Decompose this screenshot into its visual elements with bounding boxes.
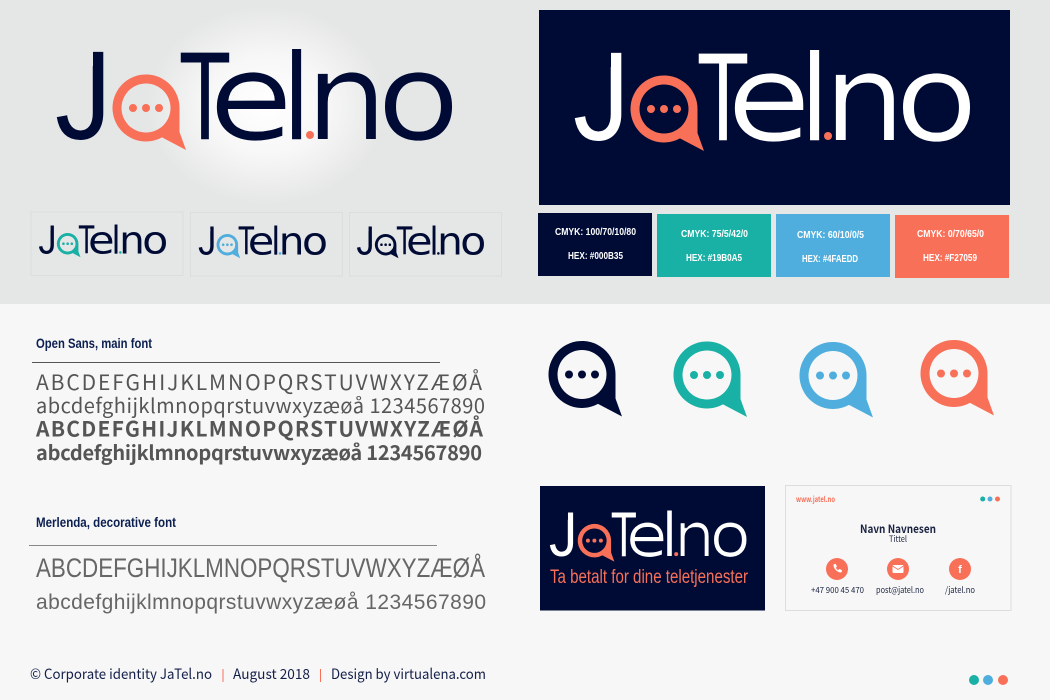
- colour swatch: navy: CMYK: 100/70/10/80: [555, 226, 636, 238]
- panel: white background glow: [147, 6, 387, 205]
- panel: navy logo variant: T: [396, 219, 412, 264]
- panel: blue logo variant: o: [302, 219, 328, 264]
- panel: blue logo variant: l: [271, 220, 280, 264]
- panel: navy logo variant: J: [356, 219, 375, 264]
- panel: reversed logo on navy: l: [800, 30, 829, 169]
- footer colour dots: [969, 675, 1008, 685]
- panel: teal logo variant: o: [142, 218, 168, 263]
- panel: decorative font specimen: [29, 514, 486, 614]
- panel: navy logo variant: n: [437, 220, 463, 264]
- icon: blue speech bubble: [800, 342, 873, 418]
- panel: navy logo variant: e: [406, 219, 433, 264]
- panel: logo and colour background: [0, 0, 1050, 304]
- panel: teal logo variant: e: [88, 218, 115, 263]
- phone number: +47 900 45 470: [811, 584, 864, 596]
- panel: navy business card front: [540, 486, 765, 610]
- panel: navy business card front: o: [709, 502, 751, 571]
- panel: main font specimen: [32, 335, 485, 466]
- tagline: Ta betalt for dine teletjenester: [550, 567, 749, 588]
- colour swatch: blue: CMYK: 60/10/0/5: [797, 229, 864, 241]
- text block: decorative uppercase: ABCDEFGHIJKLMNOPQRSTUVWXYZÆØÅ: [36, 552, 485, 583]
- text block: decorative lowercase and digits: abcdefghijklmnopqrstuvwxyzæøå 1234567890: [36, 591, 486, 614]
- colour swatch: blue: HEX: #4FAEDD: [802, 253, 858, 265]
- job title: Tittel: [889, 533, 908, 545]
- panel: blue logo variant: T: [238, 219, 254, 264]
- panel: blue logo variant: [190, 212, 342, 276]
- panel: blue logo variant: e: [248, 219, 274, 264]
- panel: navy business card front: J: [549, 499, 577, 570]
- text block: bold lowercase and digits: abcdefghijklmnopqrstuvwxyzæøå 1234567890: [36, 437, 482, 466]
- main logo: e: [208, 29, 294, 168]
- icon: envelope: [887, 558, 909, 580]
- footer credits: [30, 664, 486, 684]
- colour swatch: navy: [538, 213, 652, 276]
- email address: post@jatel.no: [876, 584, 924, 596]
- panel: blue logo variant: n: [279, 220, 304, 264]
- panel: navy business card front: l: [662, 501, 677, 570]
- panel: teal logo variant: l: [112, 219, 121, 263]
- panel: reversed logo on navy: [539, 10, 1010, 205]
- footer credits: August 2018: [233, 664, 310, 684]
- panel: reversed logo on navy: o: [894, 31, 979, 169]
- panel: teal logo variant: T: [78, 218, 94, 263]
- footer credits: Design by virtualena.com: [331, 664, 486, 684]
- panel: blue logo variant: J: [198, 219, 216, 264]
- main logo: o: [376, 30, 461, 168]
- panel: business card back: [786, 486, 1011, 610]
- text block: bold uppercase: ABCDEFGHIJKLMNOPQRSTUVWXYZÆØÅ: [35, 414, 484, 444]
- main logo: n: [305, 29, 388, 168]
- website address: www.jatel.no: [796, 494, 835, 505]
- main logo: l: [282, 29, 311, 168]
- footer credits: © Corporate identity JaTel.no: [30, 664, 212, 684]
- panel: navy logo variant: o: [460, 219, 486, 264]
- panel: navy business card front: e: [625, 502, 668, 571]
- facebook handle: /jatel.no: [945, 584, 975, 596]
- panel: reversed logo on navy: J: [573, 26, 630, 167]
- icon: facebook: [949, 558, 971, 580]
- panel: navy business card front: n: [674, 501, 715, 570]
- panel: reversed logo on navy: e: [726, 30, 812, 169]
- colour swatch: coral: [895, 215, 1009, 278]
- panel: navy business card front: T: [611, 501, 636, 570]
- icon: phone: [826, 558, 848, 580]
- panel: navy logo variant: l: [430, 220, 439, 264]
- panel: teal logo variant: J: [38, 218, 57, 263]
- icon: navy speech bubble: [548, 341, 622, 416]
- colour swatch: coral: HEX: #F27059: [923, 252, 977, 264]
- card colour dots: [980, 496, 1000, 502]
- name: Navn Navnesen: [860, 521, 936, 537]
- colour swatch: blue: [776, 214, 890, 277]
- heading: decorative font: Merlenda, decorative font: [36, 514, 176, 530]
- panel: teal logo variant: n: [119, 219, 145, 263]
- main logo: J: [55, 25, 112, 166]
- colour swatch: navy: HEX: #000B35: [568, 250, 623, 262]
- colour swatch: teal: [657, 214, 771, 277]
- main logo: T: [180, 28, 229, 167]
- text block: regular uppercase: ABCDEFGHIJKLMNOPQRSTUVWXYZÆØÅ: [36, 367, 482, 397]
- colour swatch: teal: HEX: #19B0A5: [686, 252, 742, 264]
- colour swatch: teal: CMYK: 75/5/42/0: [681, 228, 748, 240]
- text block: regular lowercase and digits: abcdefghijklmnopqrstuvwxyzæøå 1234567890: [36, 390, 485, 419]
- icon: teal speech bubble: [674, 341, 747, 417]
- panel: reversed logo on navy: n: [823, 30, 906, 169]
- heading: main font: Open Sans, main font: [36, 335, 152, 351]
- main logo: [56, 49, 452, 150]
- icon: facebook: f: [958, 564, 962, 576]
- panel: teal logo variant: [31, 212, 183, 276]
- colour swatch: coral: CMYK: 0/70/65/0: [917, 228, 984, 240]
- panel: navy logo variant: [350, 212, 502, 276]
- panel: reversed logo on navy: T: [698, 29, 747, 168]
- icon: coral speech bubble: [920, 340, 994, 416]
